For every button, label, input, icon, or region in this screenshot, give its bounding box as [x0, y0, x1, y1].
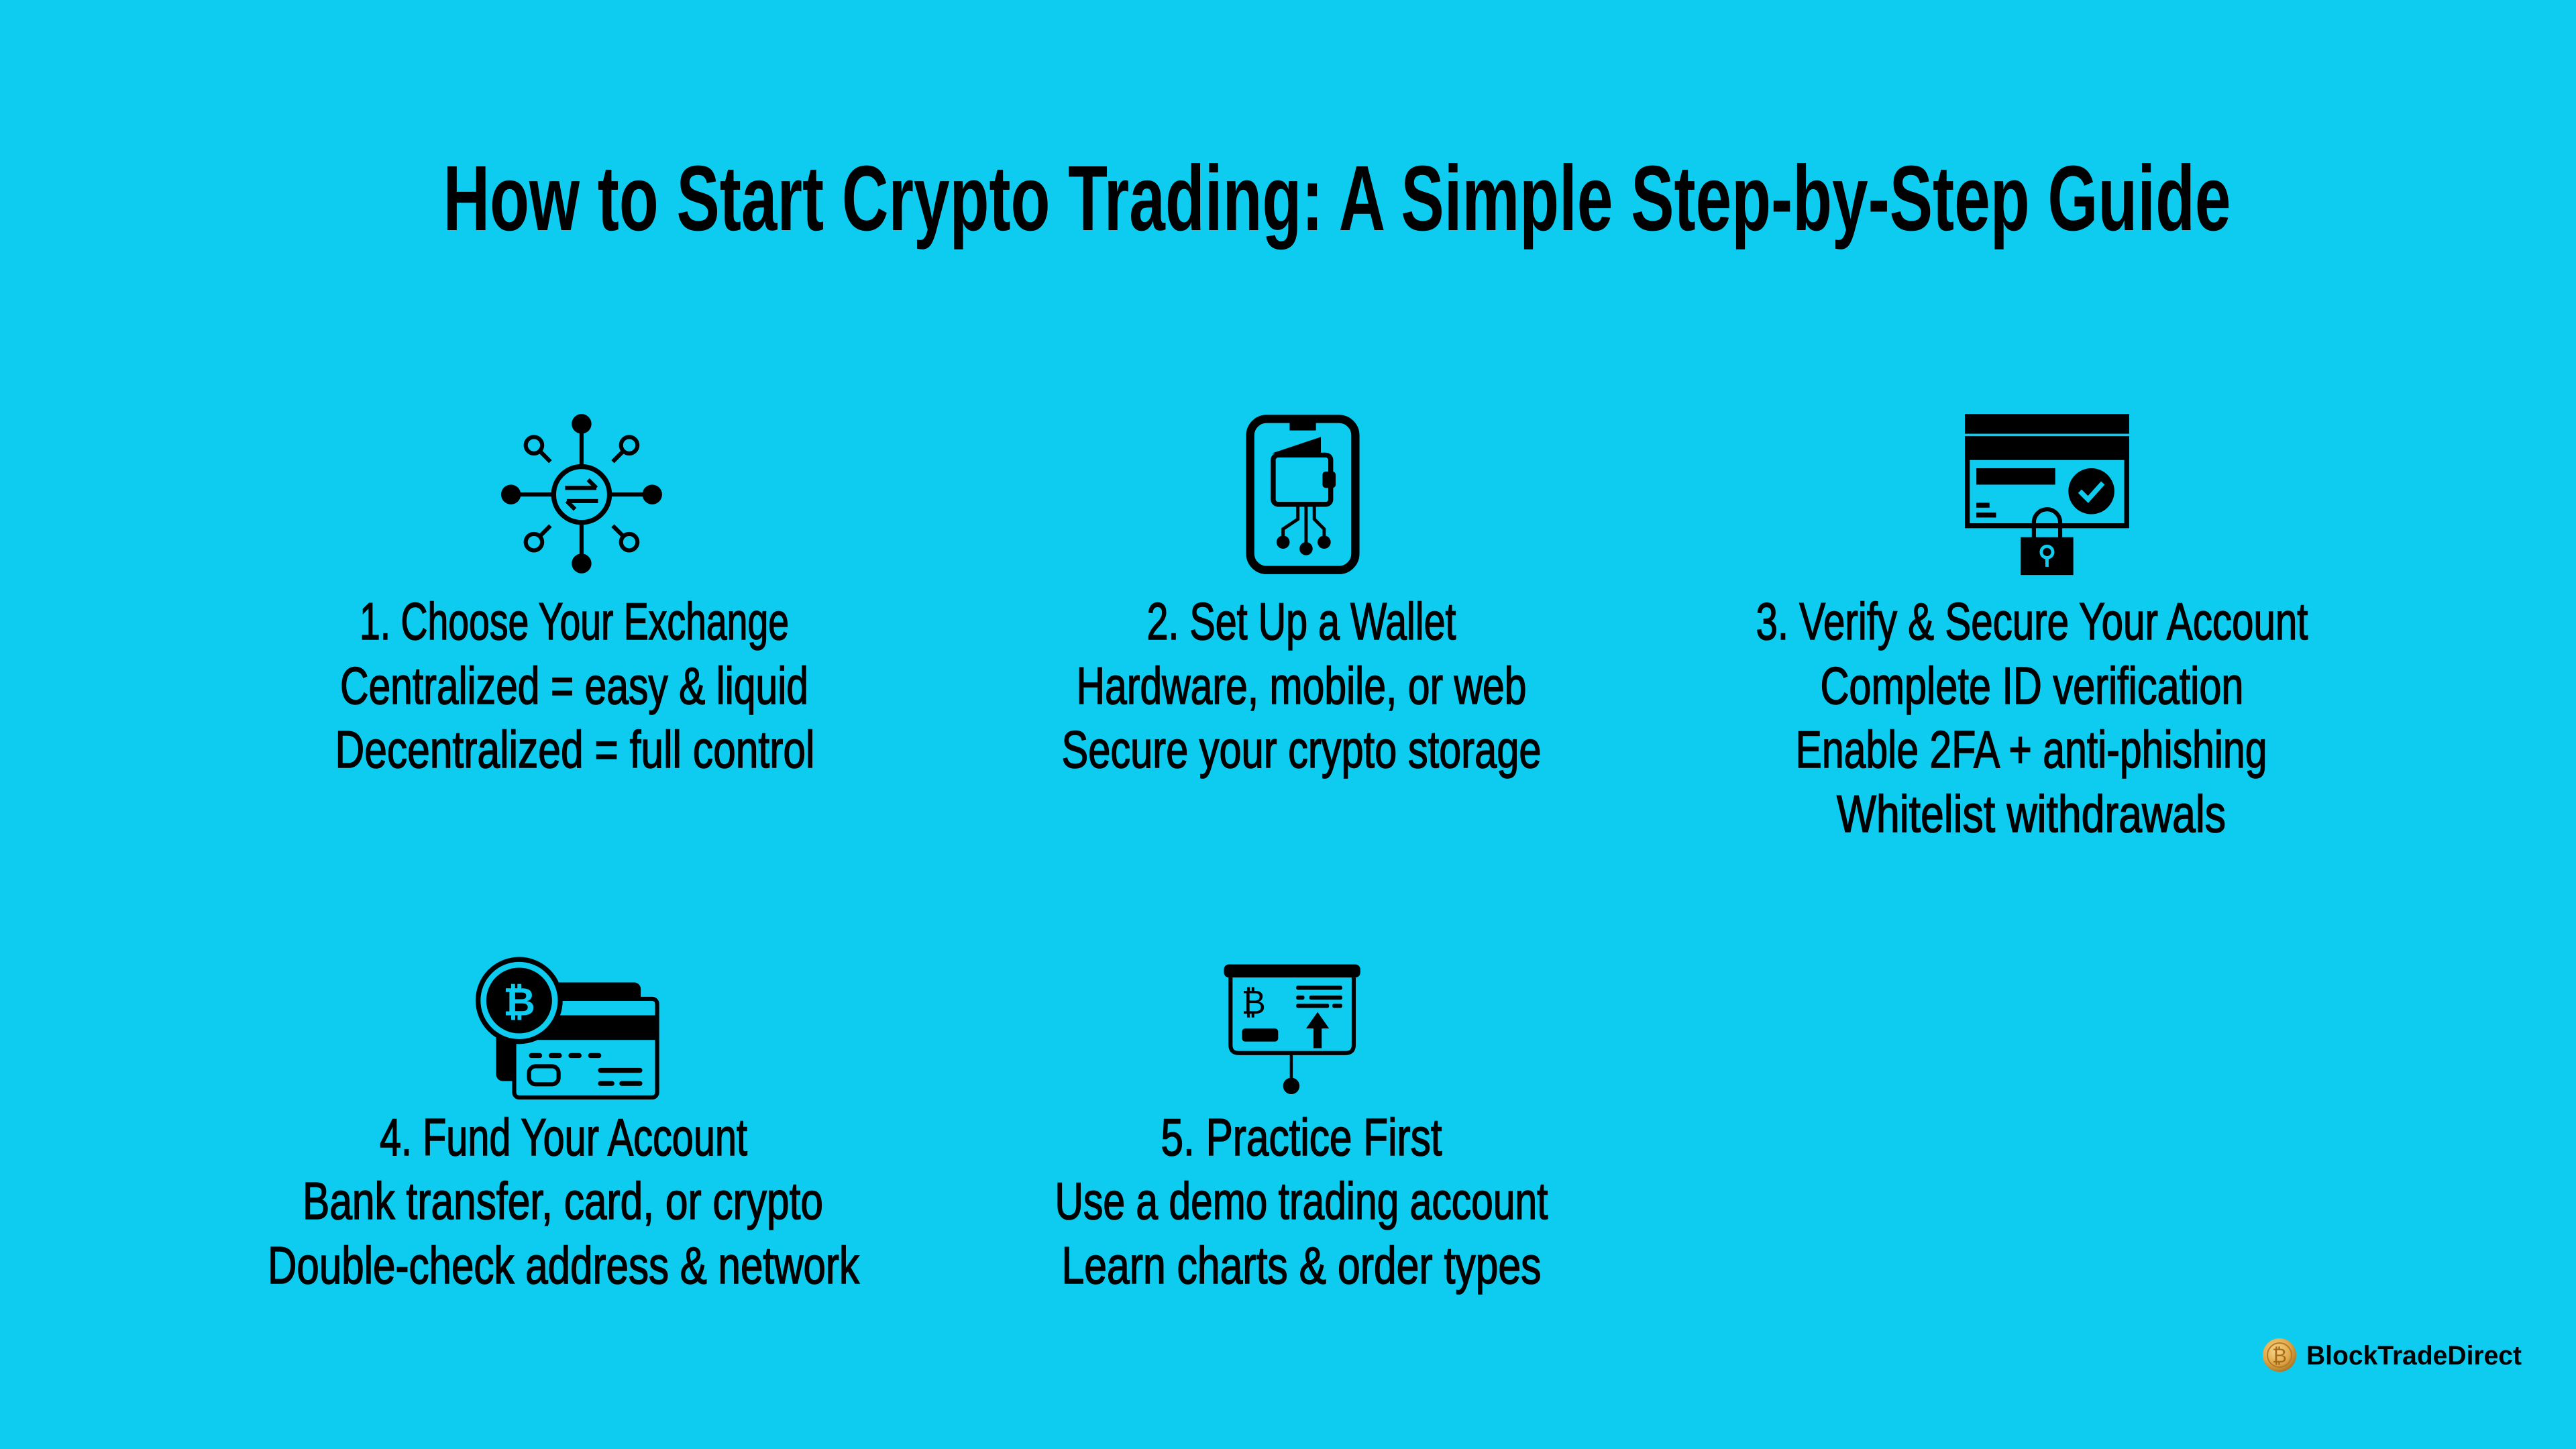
- logo: BlockTradeDirect: ₿: [2272, 1345, 2287, 1367]
- text: step 1: 1. Choose Your Exchange: [360, 592, 789, 651]
- text: step 5: Learn charts & order types: [1061, 1236, 1542, 1295]
- text: step 2: 2. Set Up a Wallet: [1147, 592, 1456, 651]
- text: step 2: Hardware, mobile, or web: [1076, 656, 1527, 715]
- text: step 1: Centralized = easy & liquid: [340, 656, 808, 715]
- icon: phone wallet: [1250, 419, 1355, 570]
- icon: bitcoin card funding: [478, 959, 657, 1097]
- text: step 3: Whitelist withdrawals: [1837, 784, 2226, 843]
- icon: demo presentation board: [1224, 965, 1360, 1094]
- text: step 2: Secure your crypto storage: [1061, 720, 1542, 779]
- text: step 2: [1061, 592, 1542, 779]
- text: step 3: 3. Verify & Secure Your Account: [1756, 592, 2308, 651]
- icon: exchange network: [501, 414, 662, 574]
- text: step 3: Enable 2FA + anti-phishing: [1795, 720, 2267, 779]
- text: step 3: Complete ID verification: [1821, 656, 2243, 715]
- text: step 5: Use a demo trading account: [1055, 1171, 1548, 1230]
- logo: BlockTradeDirect: BlockTradeDirect: [2306, 1341, 2522, 1371]
- text: step 4: 4. Fund Your Account: [380, 1108, 747, 1167]
- text: step 3: [1756, 592, 2308, 843]
- icon: secure card: [1965, 414, 2129, 575]
- icon: bitcoin card funding: ₿: [503, 980, 535, 1024]
- text: step 1: [335, 592, 814, 779]
- icon: demo presentation board: ₿: [1241, 985, 1266, 1021]
- text: step 5: 5. Practice First: [1161, 1108, 1442, 1167]
- text: step 1: Decentralized = full control: [335, 720, 814, 779]
- text: step 4: Bank transfer, card, or crypto: [303, 1171, 823, 1230]
- text: step 4: Double-check address & network: [268, 1236, 860, 1295]
- text: step 5: [1055, 1108, 1548, 1295]
- text: step 4: [268, 1108, 860, 1295]
